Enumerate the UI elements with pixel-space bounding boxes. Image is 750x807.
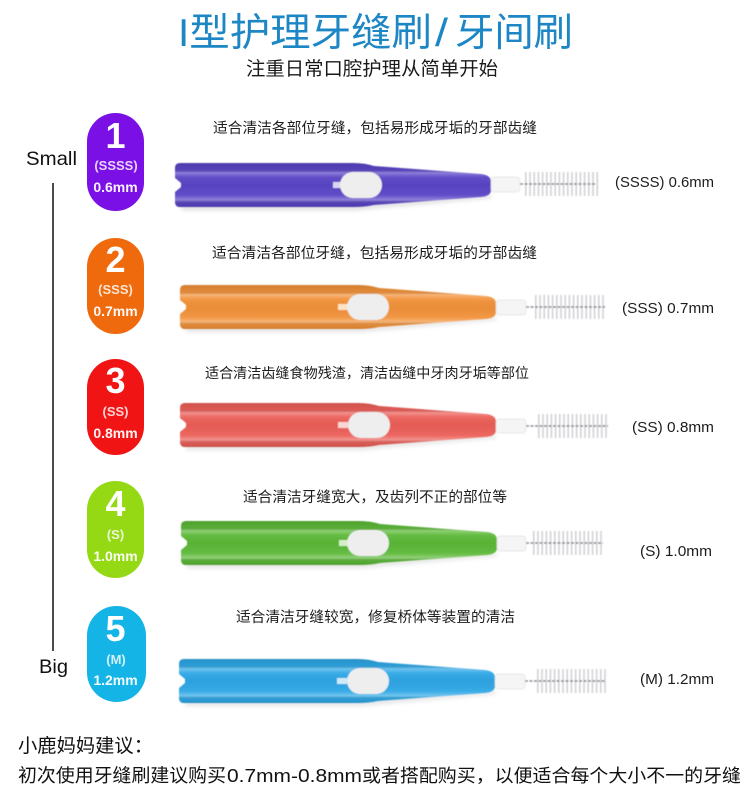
badge 5	[87, 606, 146, 702]
brush 5	[179, 659, 607, 706]
brush 1	[175, 163, 598, 210]
advice text: 0.7mm-0.8mm	[227, 765, 362, 786]
badge 2: (SSS)	[98, 282, 133, 297]
brush 3	[180, 403, 609, 450]
subtitle: 注重日常口腔护理从简单开始	[246, 58, 498, 80]
title: 牙间刷	[455, 12, 573, 55]
title: I型护理牙缝刷	[178, 12, 432, 55]
brush 2	[180, 285, 606, 332]
badge 4	[87, 481, 144, 578]
description 4: 适合清洁牙缝宽大，及齿列不正的部位等	[243, 488, 507, 506]
badge 4: (S)	[107, 527, 124, 542]
size label 3: (SS) 0.8mm	[632, 420, 714, 436]
row 4: S 1.0mm	[87, 481, 712, 578]
advice text: 或者搭配购买，以便适合每个大小不一的牙缝	[362, 766, 741, 786]
row 1: SSSS 0.6mm	[87, 113, 714, 211]
row 3: SS 0.8mm	[87, 359, 714, 455]
badge 3: (SS)	[102, 404, 128, 419]
row 2: SSS 0.7mm	[87, 238, 714, 334]
size label 5: (M) 1.2mm	[640, 672, 714, 688]
title: /	[435, 12, 448, 55]
badge 5: 5	[105, 608, 126, 649]
badge 1: 0.6mm	[93, 179, 138, 195]
badge 2	[87, 238, 144, 334]
badge 3	[87, 359, 144, 455]
row 5: M 1.2mm	[87, 606, 714, 706]
badge 1	[87, 113, 144, 211]
size label 4: (S) 1.0mm	[640, 544, 712, 560]
badge 3: 0.8mm	[93, 425, 138, 441]
size label 2: (SSS) 0.7mm	[622, 301, 714, 317]
badge 5: 1.2mm	[93, 672, 138, 688]
badge 2: 0.7mm	[93, 303, 138, 319]
badge 1: 1	[105, 115, 126, 156]
badge 4: 1.0mm	[93, 548, 138, 564]
advice text: 初次使用牙缝刷建议购买	[18, 765, 226, 786]
badge 2: 2	[105, 239, 126, 280]
description 2: 适合清洁各部位牙缝，包括易形成牙垢的牙部齿缝	[212, 245, 537, 262]
advice heading: 小鹿妈妈建议：	[18, 735, 153, 757]
badge 1: (SSSS)	[94, 158, 138, 173]
label: small: Small	[26, 148, 77, 170]
advice text	[18, 765, 741, 786]
description 5: 适合清洁牙缝较宽，修复桥体等装置的清洁	[236, 608, 515, 626]
badge 4: 4	[105, 483, 126, 524]
brush 4	[181, 521, 604, 568]
description 1: 适合清洁各部位牙缝，包括易形成牙垢的牙部齿缝	[213, 120, 537, 137]
size scale: small to big	[26, 148, 77, 678]
size label 1: (SSSS) 0.6mm	[615, 175, 714, 191]
badge 3: 3	[105, 360, 126, 401]
title	[178, 12, 573, 55]
badge 5: (M)	[106, 652, 126, 667]
label: big: Big	[39, 656, 68, 678]
description 3: 适合清洁齿缝食物残渣，清洁齿缝中牙肉牙垢等部位	[205, 365, 529, 381]
